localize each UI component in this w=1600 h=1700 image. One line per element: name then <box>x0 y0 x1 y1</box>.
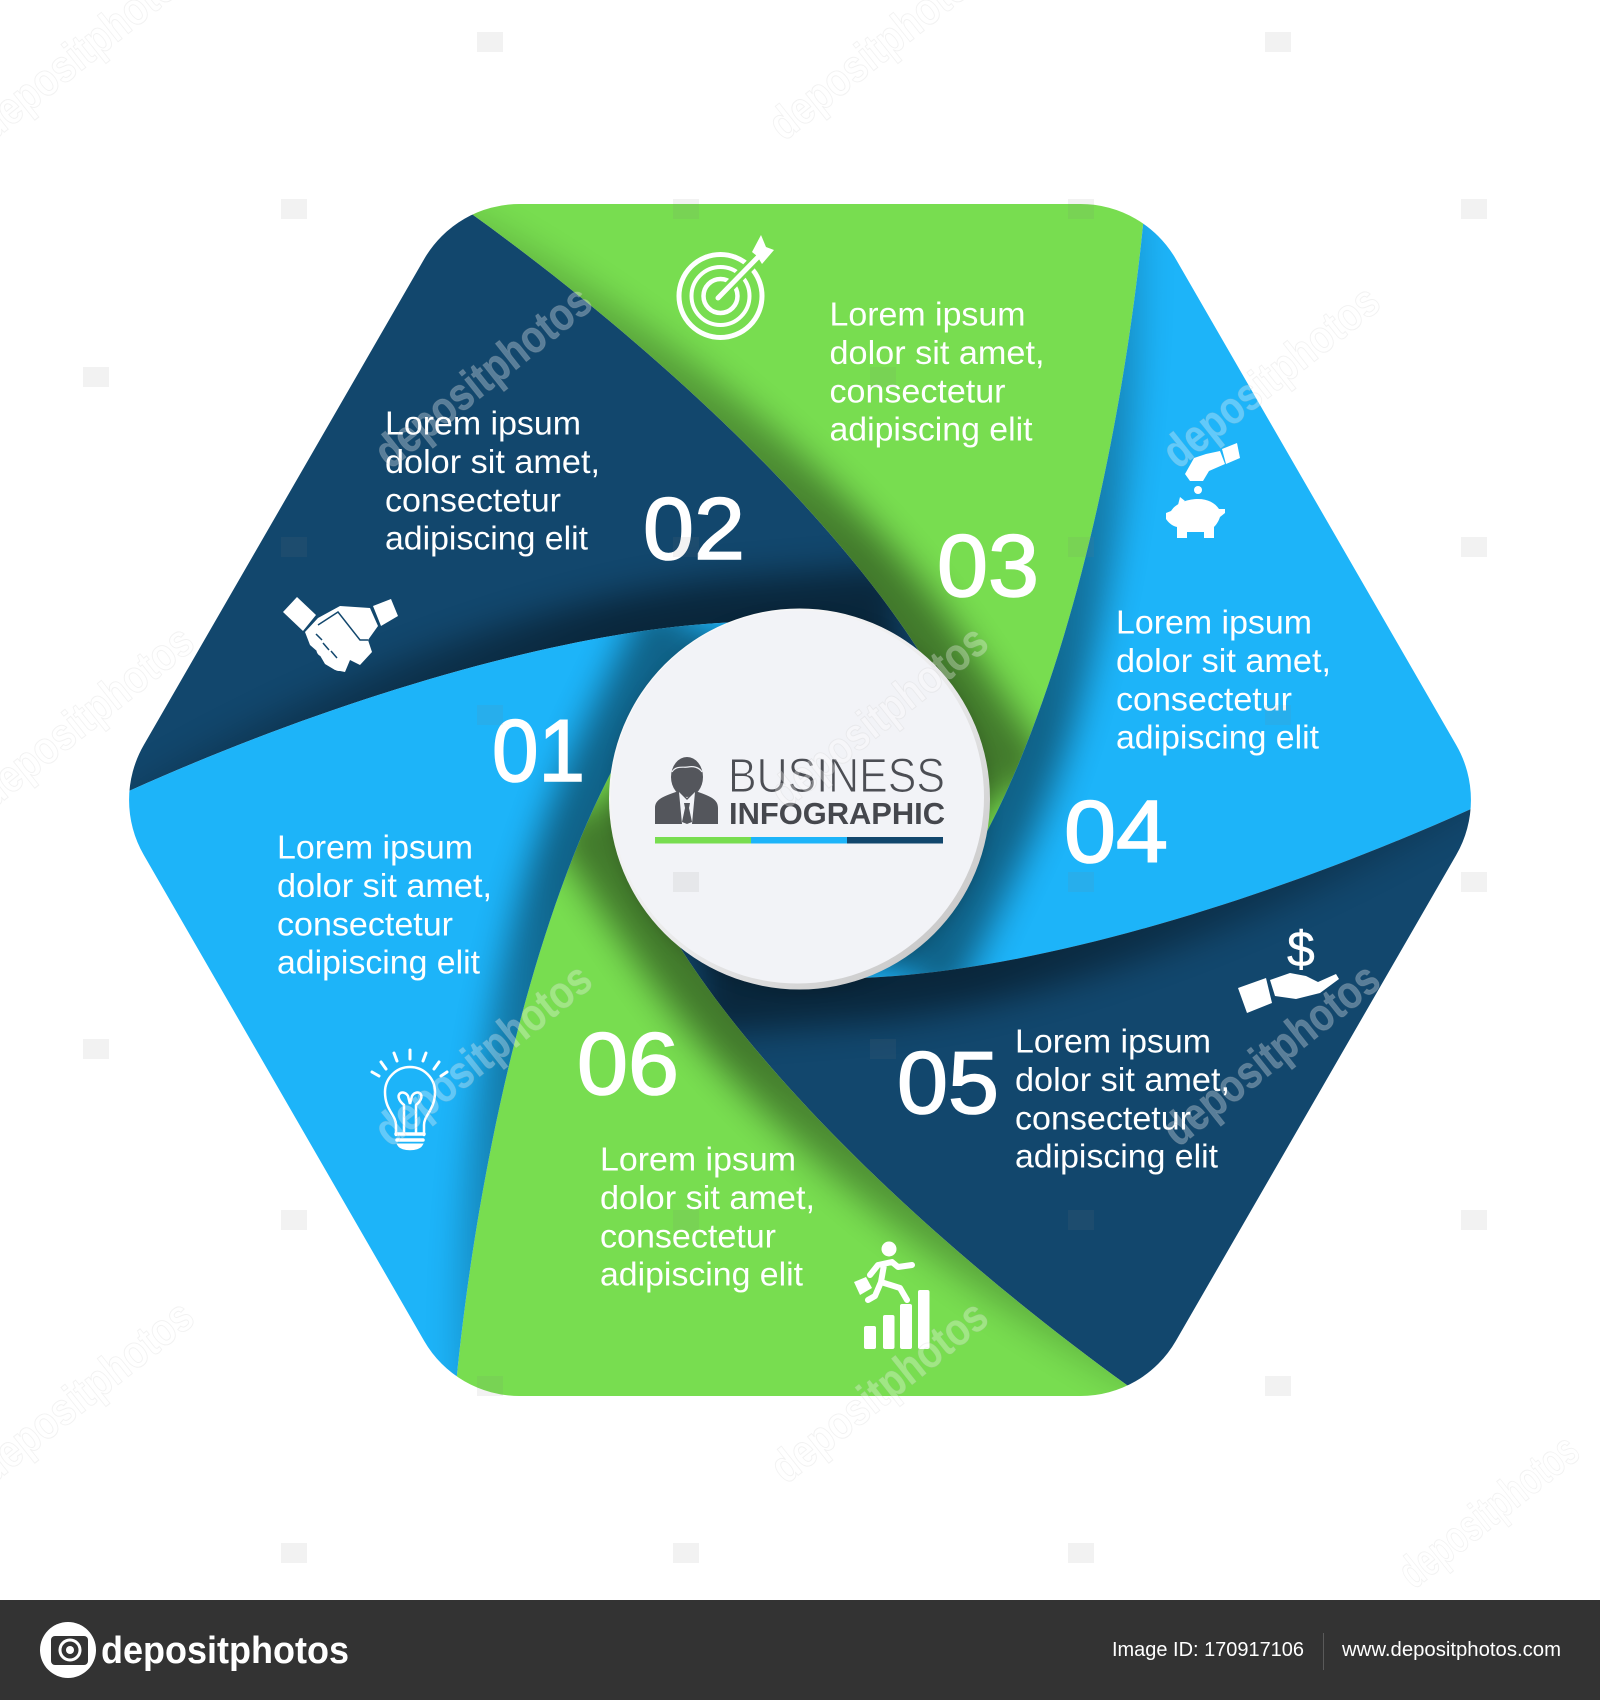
text block 06: dolor sit amet, <box>600 1179 815 1216</box>
text block 03 <box>830 296 1044 448</box>
text block 03: adipiscing elit <box>830 411 1032 448</box>
tricolor bar <box>655 837 943 844</box>
footer logo wordmark: depositphotos <box>101 1630 349 1672</box>
panel: blade 01 light blue <box>129 622 728 1376</box>
watermark camera marks <box>83 32 1487 1563</box>
footer logo icon <box>40 1622 96 1678</box>
text block 06: adipiscing elit <box>600 1256 803 1293</box>
icon: hand and piggy bank <box>1166 443 1240 538</box>
icon: handshake <box>283 597 398 672</box>
watermark text: depositphotos <box>364 952 601 1156</box>
number 06: 06 <box>577 1014 679 1113</box>
text block 04 <box>1116 604 1331 756</box>
text block 04: consectetur <box>1116 680 1292 717</box>
text block 01: consectetur <box>277 905 453 942</box>
icon: lightbulb <box>372 1050 447 1149</box>
icon: hand with dollar <box>1238 921 1339 1013</box>
center circle <box>609 608 991 992</box>
number 05: 05 <box>897 1033 999 1132</box>
number 01: 01 <box>492 701 585 800</box>
heading: business infographic: INFOGRAPHIC <box>729 796 945 831</box>
icon: hand with dollar: $ <box>1287 921 1315 977</box>
text block 01: dolor sit amet, <box>277 867 492 904</box>
watermark text: depositphotos <box>364 274 601 478</box>
text block 01 <box>277 828 492 981</box>
text block 06: consectetur <box>600 1217 776 1254</box>
text block 05: dolor sit amet, <box>1015 1061 1230 1098</box>
text block 04: dolor sit amet, <box>1116 642 1331 679</box>
website url: www.depositphotos.com <box>1341 1639 1561 1661</box>
panel: blade 03 green <box>472 204 1144 831</box>
text block 03: dolor sit amet, <box>830 334 1044 371</box>
icon: businessman <box>655 757 718 824</box>
text block 02: Lorem ipsum <box>385 404 581 442</box>
text block 03: Lorem ipsum <box>830 296 1026 332</box>
footer bar <box>0 1600 1600 1700</box>
text block 05: adipiscing elit <box>1015 1138 1218 1175</box>
panel: blade 05 dark blue <box>680 809 1470 1386</box>
number 02: 02 <box>643 479 745 578</box>
text block 05: Lorem ipsum <box>1015 1022 1211 1060</box>
watermark text: depositphotos <box>760 614 997 818</box>
watermark text: depositphotos <box>1152 952 1389 1156</box>
number 03: 03 <box>937 516 1039 615</box>
text block 01: Lorem ipsum <box>277 828 473 866</box>
number 04: 04 <box>1064 782 1168 881</box>
text block 06 <box>600 1140 815 1293</box>
panel: blade 06 green <box>456 773 1128 1396</box>
watermark text: depositphotos <box>760 1289 997 1493</box>
panel: blade 02 dark blue <box>130 214 919 791</box>
image id: Image ID: 170917106 <box>1112 1639 1304 1661</box>
text block 03: consectetur <box>830 372 1006 409</box>
text block 01: adipiscing elit <box>277 944 480 981</box>
heading: business infographic <box>728 750 945 831</box>
text block 02: consectetur <box>385 481 561 518</box>
text block 02: adipiscing elit <box>385 520 588 557</box>
hexagon with six swirling blades <box>100 76 1500 1524</box>
text block 02: dolor sit amet, <box>385 443 600 480</box>
text block 05 <box>1015 1022 1230 1175</box>
watermark text: depositphotos <box>1152 274 1389 478</box>
heading: business infographic: BUSINESS <box>728 750 945 803</box>
icon: runner on bar chart <box>854 1242 930 1349</box>
text block 02 <box>385 404 600 557</box>
text block 06: Lorem ipsum <box>600 1140 796 1178</box>
text block 05: consectetur <box>1015 1099 1191 1136</box>
text block 04: adipiscing elit <box>1116 719 1319 756</box>
icon: target with arrow <box>679 235 774 338</box>
text block 04: Lorem ipsum <box>1116 604 1312 640</box>
panel: blade 04 light blue <box>864 224 1471 978</box>
